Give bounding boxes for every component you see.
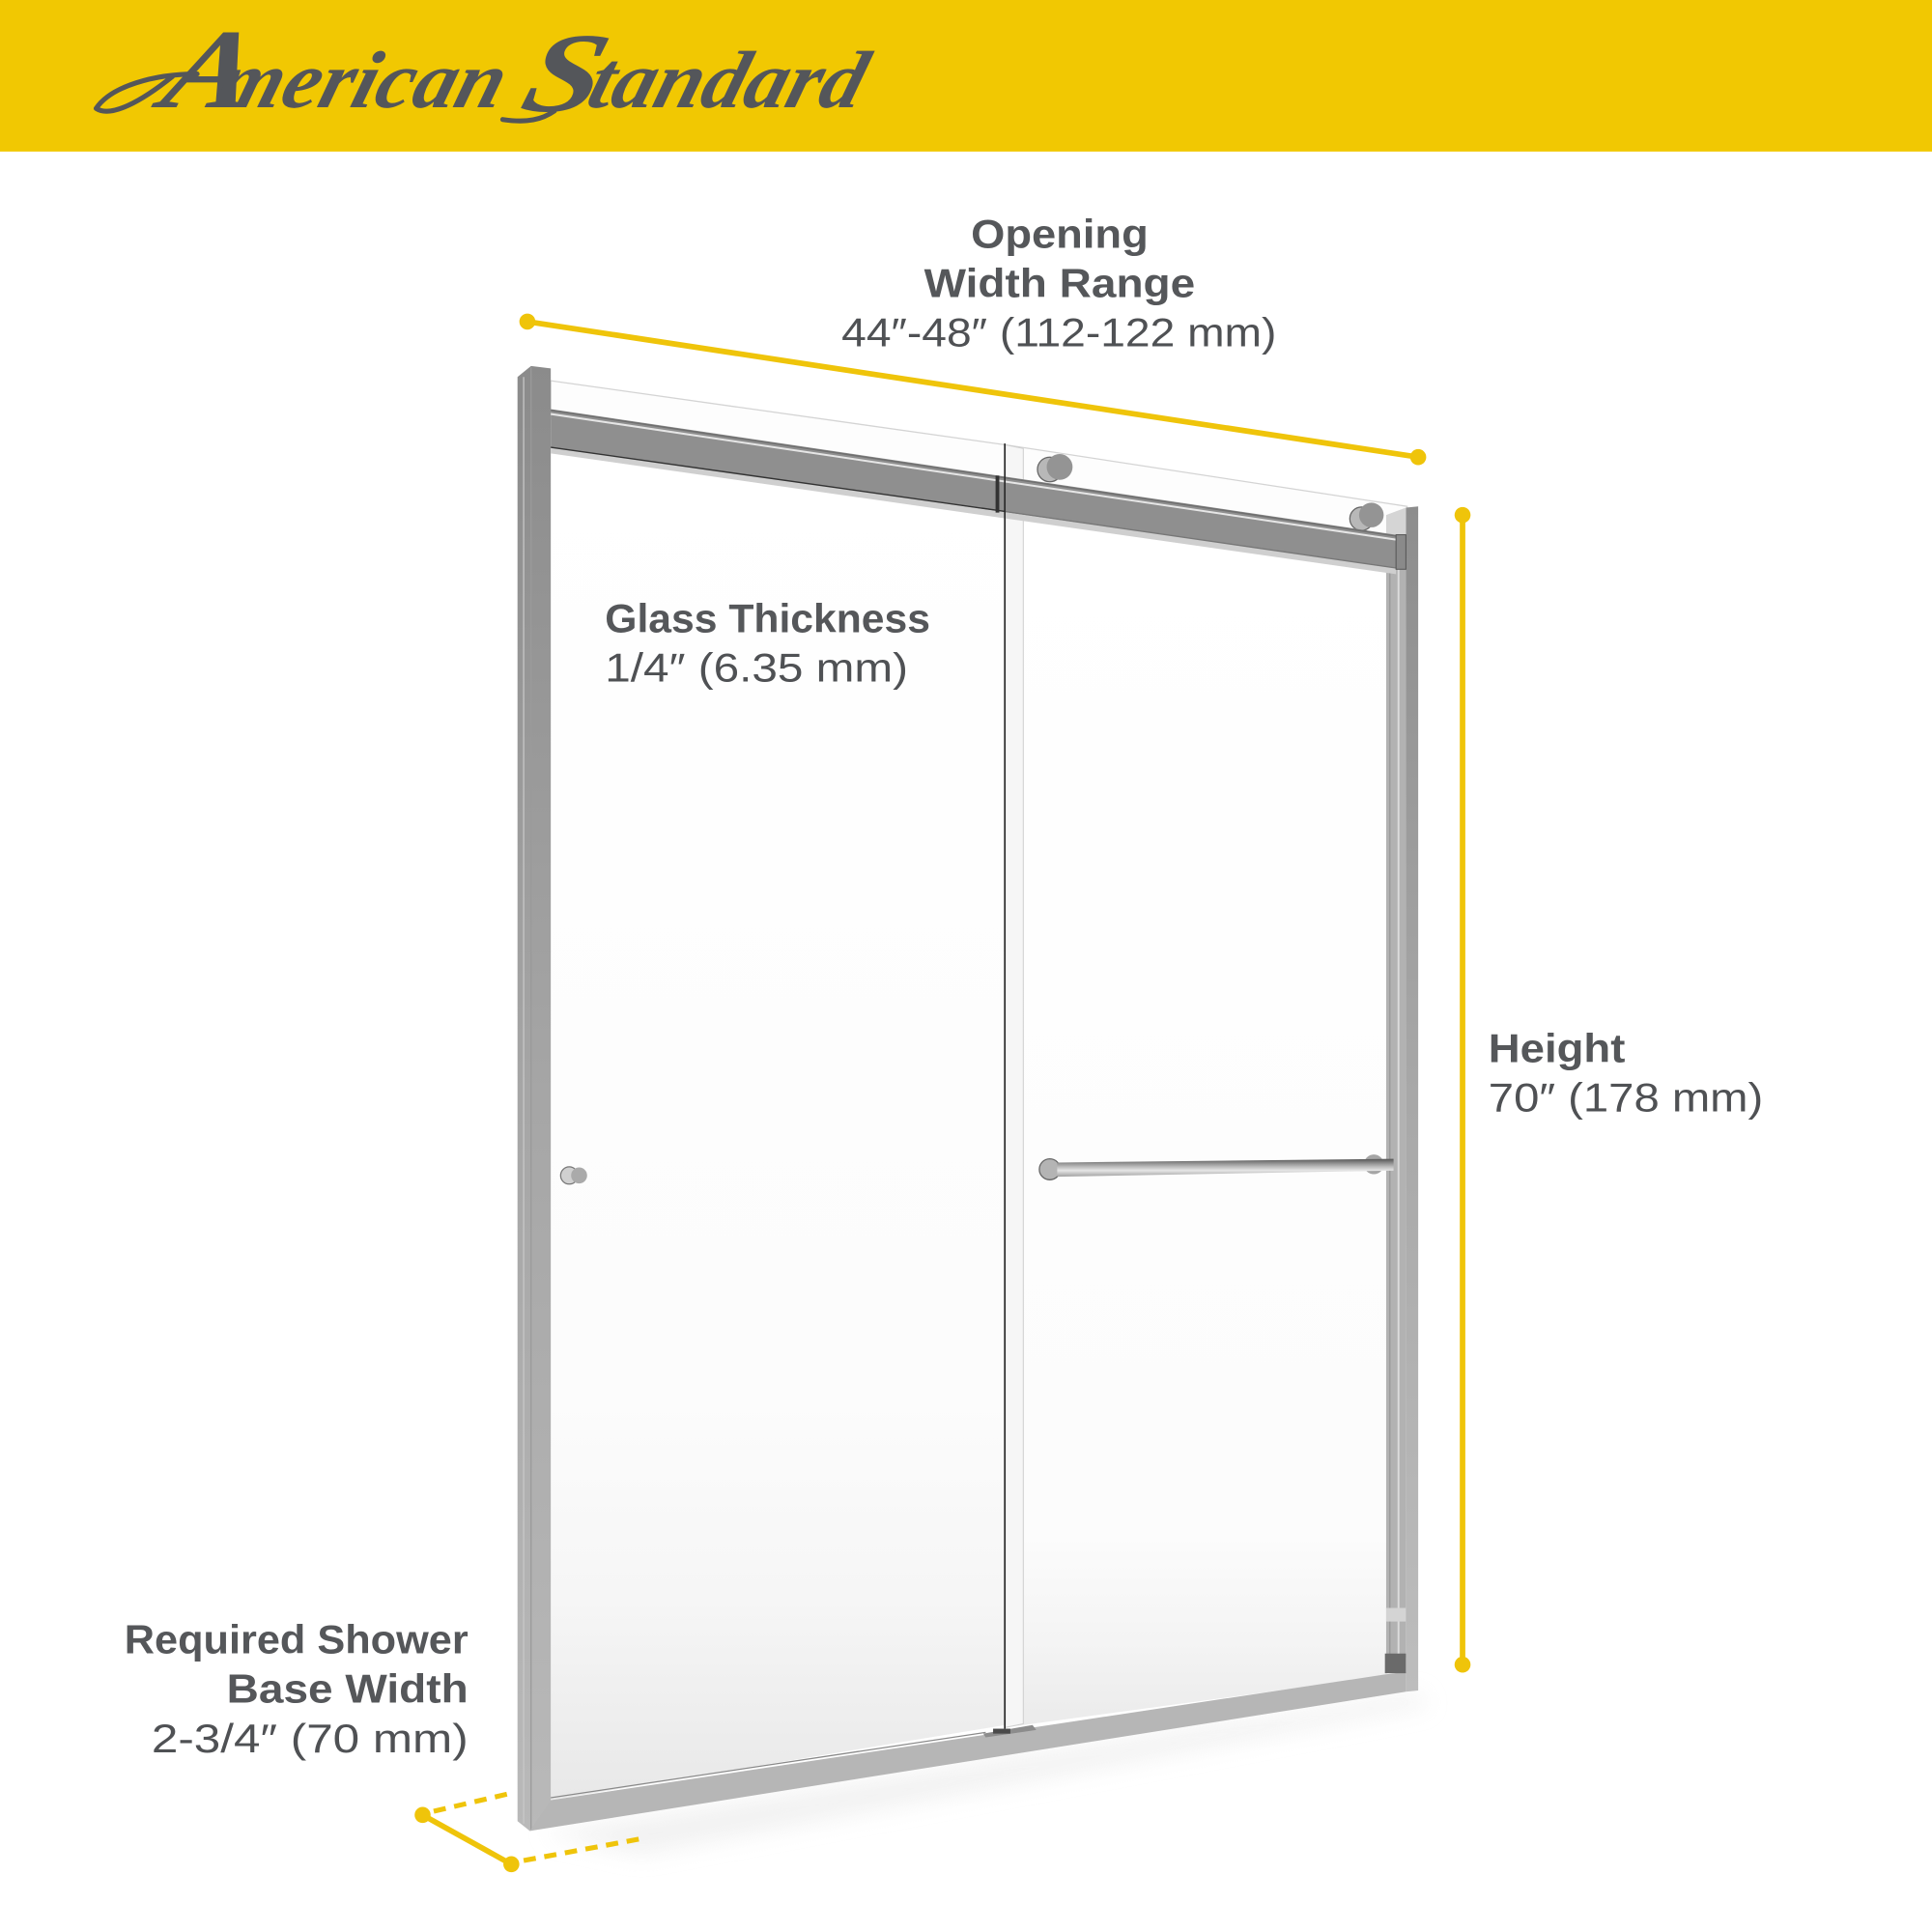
dimension label: opening width range — [841, 211, 1276, 355]
dimension label: opening width range: 44″-48″ (112-122 mm) — [841, 309, 1276, 355]
dimension label: height — [1489, 1025, 1763, 1121]
floor shadow — [542, 1693, 1430, 1855]
dimension label: glass thickness: Glass Thickness — [605, 595, 930, 640]
dimension label: opening width range: Opening — [971, 211, 1149, 256]
bottom frame rail — [529, 1672, 1406, 1831]
right glass panel — [1006, 511, 1387, 1727]
right post hinge and bracket — [1385, 1608, 1406, 1673]
dimension label: height: 70″ (178 mm) — [1489, 1075, 1763, 1121]
dimension label: opening width range: Width Range — [924, 260, 1195, 305]
dimension label: glass thickness: 1/4″ (6.35 mm) — [605, 644, 908, 690]
dimension label: required shower base width: Base Width — [227, 1666, 469, 1712]
centre glass edge — [1004, 443, 1006, 1729]
dimension line: opening width — [520, 314, 1426, 466]
centre glass overlap — [1006, 444, 1023, 1727]
towel bar — [1039, 1154, 1394, 1179]
dimension label: required shower base width: 2-3/4″ (70 mm) — [152, 1716, 469, 1761]
logo: American Standard: A — [143, 6, 275, 131]
dimension label: height: Height — [1489, 1025, 1625, 1070]
dimension line: base width — [414, 1794, 643, 1872]
roller: centre — [1037, 454, 1072, 482]
left door knob — [560, 1167, 587, 1184]
bottom guide — [983, 1725, 1037, 1737]
header banner — [0, 0, 1932, 152]
dimension line: height — [1455, 507, 1470, 1673]
top sliding rail — [551, 409, 1406, 574]
right frame post — [1386, 506, 1418, 1691]
dimension label: required shower base width — [125, 1617, 469, 1761]
left glass panel — [551, 447, 1006, 1801]
logo: American Standard: S — [510, 10, 623, 135]
dimension label: glass thickness — [605, 595, 930, 690]
left frame post — [518, 366, 551, 1831]
upper glass above the rail — [551, 381, 1407, 542]
dimension label: required shower base width: Required Shower — [125, 1617, 469, 1662]
logo: American Standard — [96, 6, 879, 135]
logo: American Standard: tandard — [579, 35, 879, 126]
logo: American Standard: merican — [207, 35, 519, 126]
shower door illustration — [518, 366, 1430, 1855]
roller: right — [1350, 502, 1383, 530]
